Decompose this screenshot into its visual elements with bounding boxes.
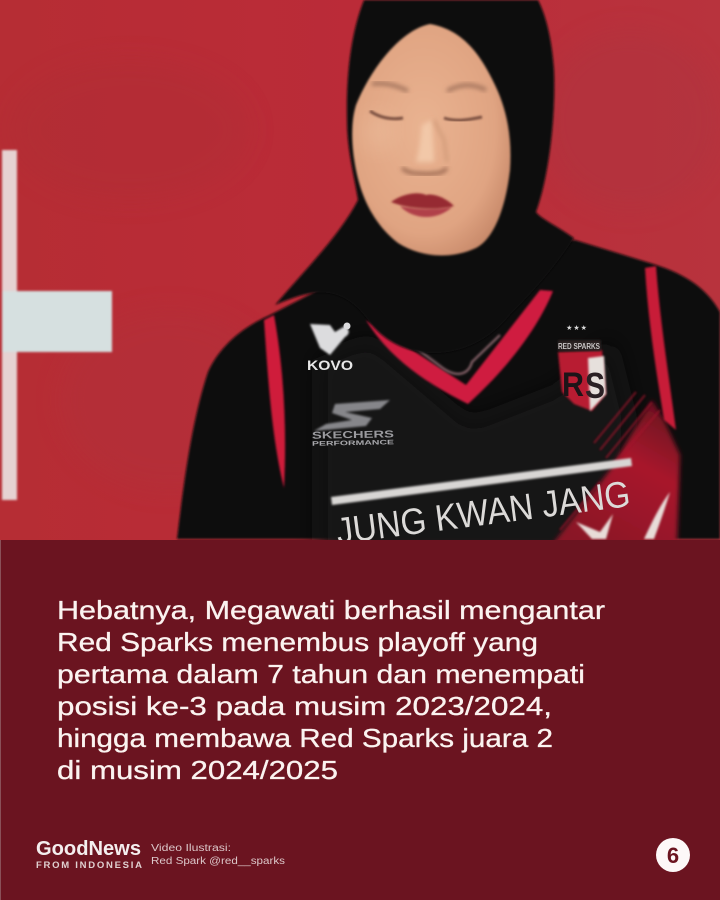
body text: hingga membawa Red Sparks juara 2 bbox=[57, 723, 553, 753]
Red Sparks crest: R bbox=[562, 366, 584, 404]
black hijab bbox=[275, 0, 574, 353]
jersey panel shading bbox=[320, 340, 630, 560]
Red Sparks crest: ★★★ bbox=[566, 324, 588, 332]
Red Sparks crest: RED SPARKS bbox=[558, 342, 601, 351]
kovo logo: KOVO bbox=[307, 358, 353, 373]
bottom text panel bbox=[0, 540, 720, 900]
face bbox=[352, 24, 510, 255]
cheek highlights bbox=[364, 114, 392, 150]
kovo logo bbox=[307, 322, 353, 373]
jersey chevron mark bbox=[576, 492, 670, 539]
Red Sparks crest: S bbox=[585, 365, 605, 406]
skechers logo: SKECHERS bbox=[312, 429, 395, 442]
photo panel: player in black jersey against red backdrop bbox=[0, 0, 720, 540]
left armhole trim bbox=[264, 315, 285, 488]
body text: Hebatnya, Megawati berhasil mengantar bbox=[57, 595, 605, 625]
red side panel with stripes bbox=[552, 392, 680, 545]
body text: Red Sparks menembus playoff yang bbox=[57, 627, 538, 657]
sponsor bar bbox=[331, 458, 632, 505]
body text: pertama dalam 7 tahun dan menempati bbox=[57, 659, 585, 689]
page number badge: 6 bbox=[667, 843, 679, 868]
white cross on backdrop bbox=[2, 150, 112, 500]
footer: GoodNews logo bbox=[36, 838, 142, 871]
necklace bbox=[408, 335, 500, 374]
V neck trim bbox=[366, 290, 553, 404]
eyebrows bbox=[372, 83, 486, 91]
right armhole trim bbox=[645, 266, 676, 430]
footer: video credit: Video Ilustrasi: bbox=[151, 843, 231, 854]
lips bbox=[391, 193, 454, 217]
skechers logo bbox=[312, 400, 395, 448]
skechers logo: PERFORMANCE bbox=[312, 439, 395, 448]
body text: di musim 2024/2025 bbox=[57, 755, 338, 785]
body text bbox=[57, 595, 605, 785]
player body and jersey bbox=[177, 240, 720, 560]
footer: video credit bbox=[151, 843, 285, 867]
page number badge bbox=[656, 838, 690, 872]
red backdrop bbox=[0, 0, 720, 540]
footer: GoodNews logo: GoodNews bbox=[36, 838, 141, 860]
footer: GoodNews logo: FROM INDONESIA bbox=[36, 860, 142, 871]
black torso and arms bbox=[177, 240, 720, 539]
Red Sparks crest bbox=[558, 324, 606, 411]
player head with hijab bbox=[275, 0, 574, 353]
footer: video credit: Red Spark @red__sparks bbox=[151, 856, 285, 867]
closed eyes bbox=[370, 111, 482, 120]
nose bbox=[402, 120, 447, 174]
body text: posisi ke-3 pada musim 2023/2024, bbox=[57, 691, 552, 721]
